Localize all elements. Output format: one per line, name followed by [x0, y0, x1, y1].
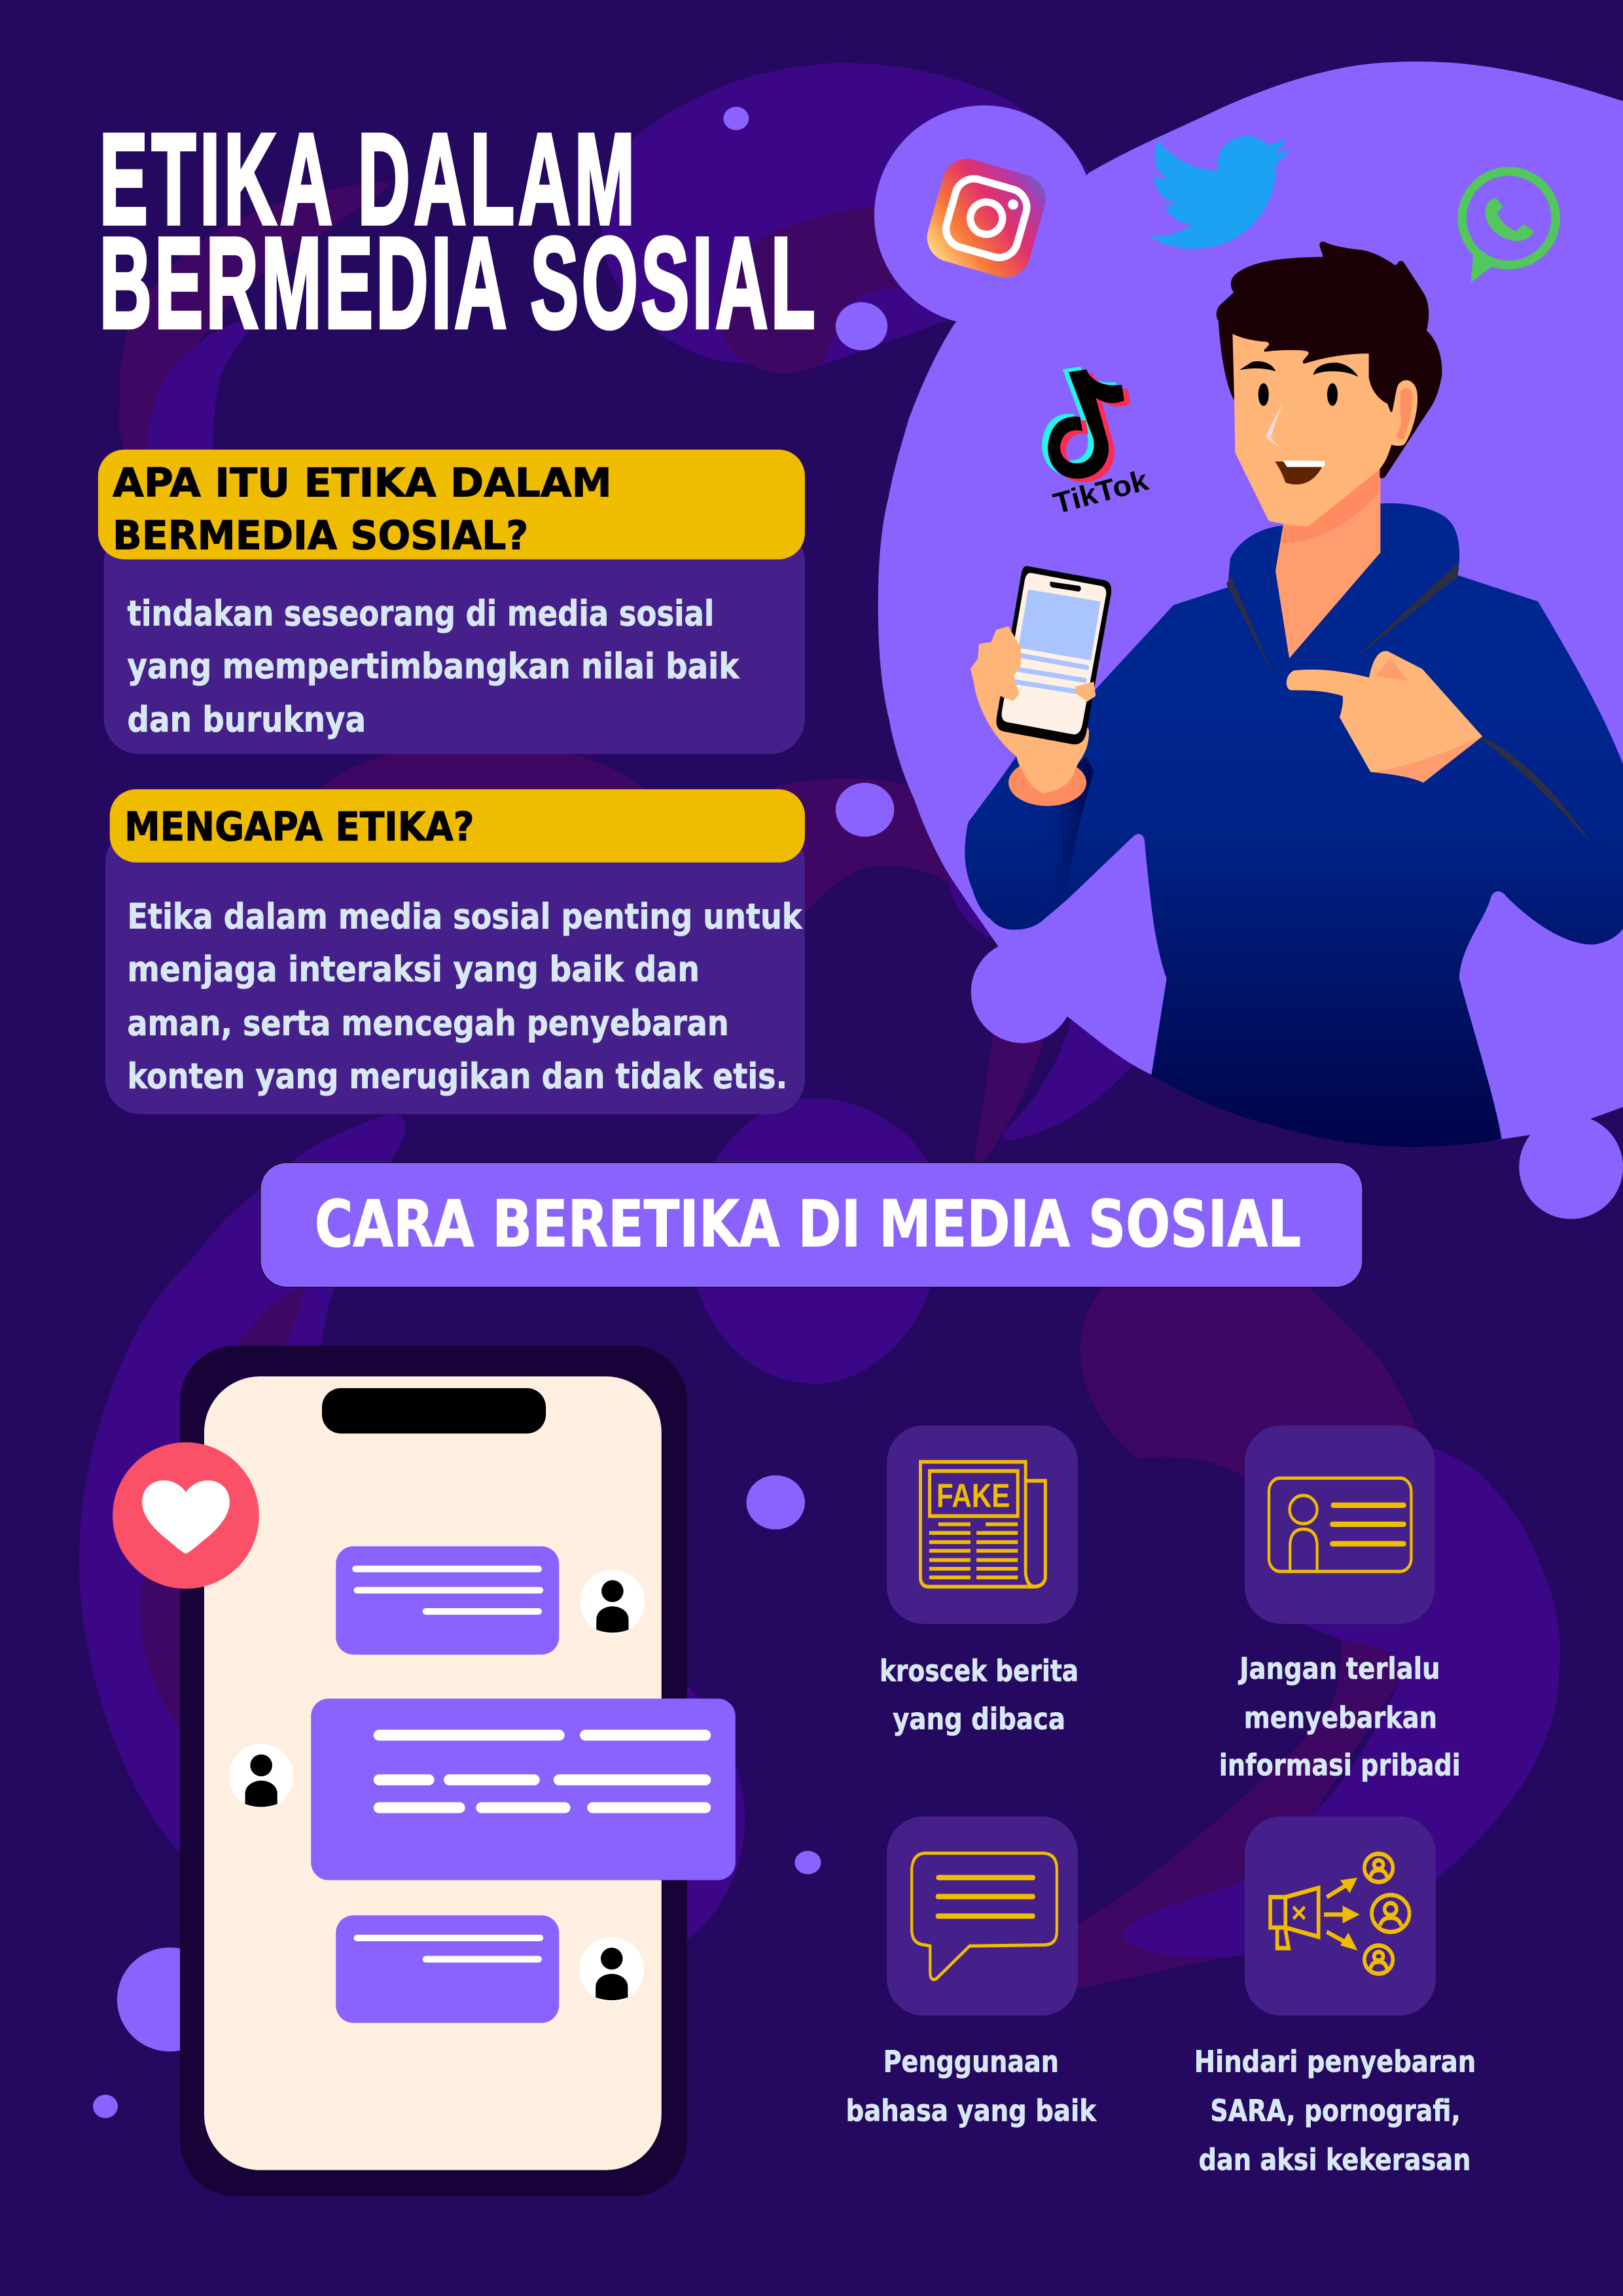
body text: Etika dalam media sosial penting untuk — [128, 895, 803, 937]
screen — [204, 1376, 662, 2170]
phone with chat — [180, 1346, 736, 2197]
banner: cara beretika — [260, 1162, 1363, 1287]
icon: twitter — [1149, 136, 1291, 249]
background blobs — [79, 63, 1560, 2013]
sleeve shadow — [1033, 757, 1094, 921]
icon: megaphone and people — [1270, 1854, 1410, 1974]
panel: mengapa etika — [105, 789, 805, 1115]
heading text: BERMEDIA SOSIAL? — [113, 513, 528, 559]
mouth — [1275, 461, 1324, 484]
icon: fake newspaper: FAKE — [936, 1477, 1010, 1515]
violet backdrop blob behind character — [874, 62, 1623, 1219]
panel: apa itu etika — [98, 450, 805, 754]
avatar 3 — [580, 1937, 644, 2001]
title: BERMEDIA SOSIAL — [99, 211, 815, 355]
label: Hindari penyebaran — [1194, 2044, 1476, 2079]
icon: instagram — [921, 153, 1052, 283]
label: bahasa yang baik — [846, 2093, 1097, 2128]
body text — [128, 895, 803, 1096]
card background — [1245, 1426, 1435, 1624]
small decorative circles — [93, 107, 894, 2118]
icon: fake newspaper — [921, 1462, 1045, 1587]
head — [1217, 242, 1442, 543]
phone body — [180, 1346, 687, 2197]
title — [99, 107, 815, 355]
hoodie — [965, 503, 1623, 1147]
label — [1194, 2044, 1476, 2178]
avatar 1 — [580, 1570, 645, 1634]
label — [846, 2044, 1097, 2128]
label — [880, 1653, 1079, 1736]
label: kroscek berita — [880, 1653, 1079, 1688]
cuff — [1008, 759, 1086, 806]
hoodie creases — [1226, 562, 1591, 843]
character: man pointing at himself holding a phone — [965, 242, 1623, 1147]
card: kroscek berita — [880, 1426, 1079, 1736]
card: informasi pribadi — [1219, 1426, 1461, 1783]
body text: yang mempertimbangkan nilai baik — [128, 645, 740, 687]
label — [1219, 1651, 1461, 1783]
card: hindari sara — [1194, 1816, 1476, 2178]
avatar 2 — [229, 1744, 293, 1808]
icon: speech bubble — [912, 1853, 1057, 1979]
body text: menjaga interaksi yang baik dan — [128, 948, 700, 990]
phone held in hand — [996, 566, 1111, 744]
notch — [322, 1388, 546, 1433]
eyes and brows — [1240, 361, 1359, 406]
body text: dan buruknya — [128, 698, 366, 740]
chat bubble 3 — [336, 1915, 559, 2023]
body text — [128, 592, 740, 740]
fingers over phone — [971, 626, 1021, 701]
chat bubble 1 — [336, 1547, 559, 1655]
icon: tiktok — [1042, 367, 1152, 520]
heading bar — [98, 450, 805, 560]
icon: heart badge — [113, 1443, 259, 1588]
label: yang dibaca — [893, 1701, 1065, 1736]
label: menyebarkan — [1244, 1700, 1437, 1735]
neck — [1275, 467, 1380, 658]
card: bahasa yang baik — [846, 1816, 1097, 2128]
card background — [887, 1816, 1078, 2016]
label: Penggunaan — [883, 2044, 1059, 2079]
panel body — [104, 527, 805, 754]
chin shadow — [1281, 467, 1380, 543]
label: SARA, pornografi, — [1210, 2093, 1461, 2128]
label: dan aksi kekerasan — [1198, 2142, 1471, 2178]
card background — [1245, 1816, 1436, 2016]
body text: konten yang merugikan dan tidak etis. — [128, 1055, 787, 1096]
face — [1232, 334, 1399, 526]
hair — [1217, 242, 1442, 478]
left hand — [971, 626, 1089, 793]
icon: id card — [1269, 1478, 1411, 1571]
heading text — [113, 460, 612, 559]
body text: aman, serta mencegah penyebaran — [128, 1003, 729, 1044]
heading bar — [110, 789, 805, 863]
banner: cara beretika: CARA BERETIKA DI MEDIA SOSIAL — [315, 1187, 1301, 1262]
pointing hand — [1287, 651, 1482, 783]
icon: whatsapp — [1462, 171, 1556, 283]
icon: tiktok: TikTok — [1050, 464, 1152, 520]
panel body — [105, 827, 805, 1115]
card background — [887, 1426, 1078, 1624]
heading text: APA ITU ETIKA DALAM — [113, 460, 612, 506]
body text: tindakan seseorang di media sosial — [128, 592, 714, 634]
chat bubble 2 — [311, 1698, 736, 1880]
nose — [1265, 403, 1283, 447]
label: Jangan terlalu — [1238, 1651, 1440, 1686]
label: informasi pribadi — [1219, 1748, 1461, 1783]
title: ETIKA DALAM — [99, 107, 635, 251]
heading text: MENGAPA ETIKA? — [124, 804, 474, 850]
ear — [1391, 380, 1418, 446]
